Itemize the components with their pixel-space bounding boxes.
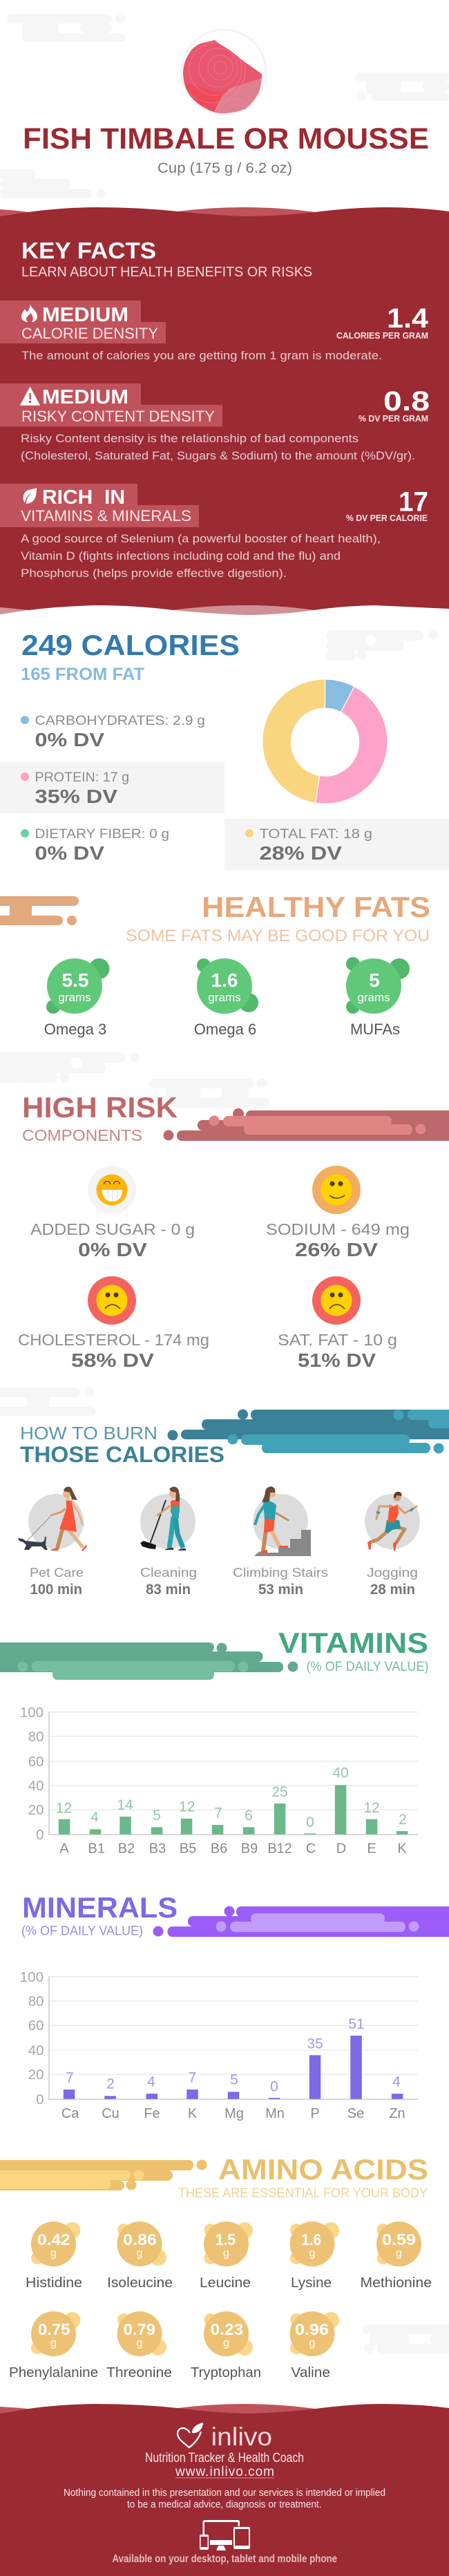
bar chart: minerals: 4: [147, 2074, 155, 2090]
item: cholesterol: CHOLESTEROL - 174 mg: [18, 1331, 209, 1349]
label: medium: MEDIUM: [42, 386, 128, 408]
description: [21, 432, 415, 462]
subheading: components: COMPONENTS: [22, 1126, 142, 1144]
amino: phenylalanine: g: [50, 2338, 57, 2349]
item: sodium: SODIUM - 649 mg: [266, 1220, 410, 1238]
amino: tryptophan: Tryptophan: [191, 2365, 261, 2380]
activity: pet care: [18, 1487, 87, 1598]
amino: isoleucine: 0.86: [123, 2231, 157, 2248]
bar chart: vitamins: B6: [211, 1841, 227, 1857]
value: 1.4: 1.4: [387, 303, 429, 334]
fact: risky content density: [0, 383, 430, 462]
bar chart: vitamins: 20: [28, 1802, 44, 1818]
bar chart: vitamins: 14: [117, 1797, 133, 1813]
label: calorie density: CALORIE DENSITY: [21, 325, 158, 342]
legend: protein: PROTEIN: 17 g: [35, 770, 129, 785]
legend: carbohydrates: [21, 713, 205, 750]
amino: isoleucine: Isoleucine: [107, 2275, 173, 2291]
bar chart: minerals: 60: [28, 2018, 44, 2034]
bar chart: vitamins: 40: [28, 1778, 44, 1794]
amino: lysine: g: [309, 2248, 315, 2260]
bar chart: minerals: 35: [307, 2036, 323, 2052]
bar chart: vitamins: 40: [332, 1765, 349, 1781]
badge: MUFAs: MUFAs: [350, 1021, 400, 1038]
unit: % DV PER CALORIE: [346, 513, 428, 523]
subheading: LEARN ABOUT HEALTH BENEFITS OR RISKS: [21, 265, 312, 280]
item: cholesterol: 58% DV: [71, 1349, 154, 1371]
subheading: from fat: 165 FROM FAT: [21, 665, 144, 684]
bar chart: vitamins: 100: [20, 1705, 44, 1721]
bar chart: vitamins: 12: [363, 1800, 380, 1816]
amino: isoleucine: g: [137, 2248, 142, 2260]
amino: tryptophan: 0.23: [211, 2320, 243, 2338]
fact: rich in vitamins and minerals: [0, 484, 428, 580]
description: (Cholesterol, Saturated Fat, Sugars & Sodium) to the amount (%DV/gr).: [21, 449, 415, 462]
value: 0.8: 0.8: [383, 386, 430, 417]
bar chart: vitamins: B2: [118, 1841, 135, 1857]
subheading: (% OF DAILY VALUE): [307, 1660, 428, 1674]
panel: calories and macronutrients: [0, 629, 449, 870]
badge: MUFAs: 5: [369, 969, 380, 991]
subheading: THESE ARE ESSENTIAL FOR YOUR BODY: [178, 2186, 428, 2201]
item: saturated fat: 51% DV: [298, 1349, 376, 1371]
amino: valine: 0.96: [295, 2320, 329, 2338]
tagline: Nutrition Tracker & Health Coach: [145, 2451, 304, 2465]
amino: leucine: g: [223, 2248, 229, 2260]
amino: leucine: Leucine: [200, 2275, 251, 2291]
legend: protein: 35% DV: [35, 786, 117, 807]
badge: MUFAs: [346, 957, 410, 1038]
bar chart: minerals: 2: [106, 2076, 115, 2092]
panel: healthy fats: [0, 891, 430, 1038]
disclaimer: Nothing contained in this presentation and our services is intended or implied: [64, 2487, 385, 2499]
item: cholesterol: [18, 1276, 209, 1371]
legend: protein: [21, 770, 129, 807]
amino: valine: g: [309, 2338, 315, 2349]
badge: omega 6: 1.6: [211, 969, 238, 991]
bar chart: minerals: 80: [28, 1993, 44, 2009]
amino: phenylalanine: Phenylalanine: [9, 2365, 98, 2380]
bar chart: minerals: [20, 1969, 418, 2121]
activity: climbing stairs: 53 min: [258, 1582, 303, 1598]
banner: orange shapes: [0, 896, 79, 925]
bar chart: minerals: 7: [189, 2070, 196, 2085]
bar chart: vitamins: B12: [267, 1841, 292, 1857]
activity: cleaning: Cleaning: [140, 1565, 197, 1580]
badge: omega 6: [194, 958, 258, 1038]
panel: vitamins: [0, 1627, 428, 1857]
logo wordmark: inlivo: [211, 2423, 272, 2451]
amino: threonine: 0.79: [124, 2320, 155, 2338]
badge: omega 3: 5.5: [62, 969, 88, 991]
bar chart: minerals: Mn: [265, 2106, 285, 2121]
banner: yellow shapes: [0, 2160, 207, 2190]
unit: CALORIES PER GRAM: [336, 331, 428, 341]
banner: teal shapes: [167, 1410, 449, 1454]
activity: jogging: Jogging: [367, 1565, 418, 1580]
bar chart: vitamins: 0: [36, 1827, 44, 1843]
label: vitamins and minerals: VITAMINS & MINERALS: [21, 507, 191, 524]
panel: key facts: [0, 207, 449, 615]
legend: dietary fiber: 0% DV: [35, 842, 104, 864]
bar chart: minerals: P: [310, 2106, 320, 2121]
bar chart: vitamins: 0: [306, 1815, 314, 1830]
amino: histidine: g: [50, 2248, 57, 2260]
banner: purple shapes: [153, 1906, 449, 1937]
bar chart: vitamins: B9: [241, 1841, 258, 1857]
bar chart: vitamins: 80: [28, 1729, 44, 1745]
heading: healthy fats: HEALTHY FATS: [202, 891, 430, 923]
amino: histidine: 0.42: [37, 2231, 70, 2248]
icon: devices: [200, 2520, 250, 2550]
bar chart: minerals: Cu: [102, 2106, 120, 2121]
item: sodium: [266, 1166, 410, 1260]
fact: calorie density: [0, 301, 429, 362]
badge: omega 6: Omega 6: [194, 1021, 256, 1038]
legend: total fat: 28% DV: [260, 842, 342, 864]
bar chart: minerals: Ca: [61, 2106, 79, 2121]
icon: flame: [21, 304, 37, 322]
activity: jogging: [365, 1492, 420, 1598]
description: [21, 532, 381, 580]
bar chart: minerals: 5: [230, 2072, 238, 2088]
heading: amino acids: AMINO ACIDS: [218, 2153, 428, 2186]
amino: methionine: 0.59: [382, 2231, 416, 2248]
bar chart: minerals: 20: [28, 2067, 44, 2083]
badge: omega 6: grams: [208, 991, 241, 1004]
disclaimer: to be a medical advice, diagnosis or treatment.: [127, 2499, 322, 2510]
legend: carbohydrates: 0% DV: [35, 729, 104, 750]
amino: lysine: 1.6: [301, 2231, 321, 2248]
heading: minerals: MINERALS: [22, 1891, 178, 1924]
bar chart: minerals: Fe: [144, 2106, 160, 2121]
bar chart: minerals: 51: [348, 2016, 365, 2032]
amino: methionine: g: [396, 2248, 402, 2260]
legend: carbohydrates: CARBOHYDRATES: 2.9 g: [35, 713, 205, 728]
hero image: fish fillet: [181, 29, 267, 115]
title: FISH TIMBALE OR MOUSSE: [23, 122, 429, 155]
bar chart: vitamins: K: [397, 1841, 407, 1857]
amino: lysine: [290, 2222, 339, 2291]
amino: threonine: g: [137, 2338, 142, 2349]
activity: cleaning: [140, 1487, 197, 1598]
badge: omega 3: Omega 3: [44, 1021, 106, 1038]
amino: phenylalanine: [9, 2311, 98, 2380]
amino: leucine: [200, 2222, 253, 2291]
bar chart: vitamins: C: [306, 1841, 316, 1857]
bar chart: minerals: 0: [36, 2092, 44, 2108]
heading: key facts: KEY FACTS: [21, 238, 156, 263]
item: added sugar: [30, 1166, 195, 1260]
bar chart: vitamins: 25: [271, 1784, 288, 1800]
bar chart: minerals: Se: [347, 2106, 364, 2121]
activity: jogging: 28 min: [370, 1582, 415, 1598]
heading: calories: 249 CALORIES: [21, 629, 240, 661]
icon: warning: [21, 388, 39, 405]
bar chart: minerals: 40: [28, 2043, 44, 2058]
activity: cleaning: 83 min: [146, 1582, 191, 1598]
panel: minerals: [20, 1891, 449, 2121]
bar chart: vitamins: [20, 1705, 418, 1857]
amino: threonine: Threonine: [106, 2365, 172, 2380]
logo: heart and leaf: [178, 2423, 203, 2447]
amino: tryptophan: g: [223, 2338, 229, 2349]
banner: green shapes: [0, 1642, 298, 1680]
amino: methionine: Methionine: [361, 2275, 432, 2291]
amino: valine: Valine: [292, 2365, 330, 2380]
description: A good source of Selenium (a powerful booster of heart health),: [21, 532, 381, 545]
bar chart: vitamins: 6: [245, 1808, 253, 1824]
panel: amino acids: [0, 2153, 432, 2380]
bar chart: vitamins: 60: [28, 1754, 44, 1770]
disclaimer: [64, 2487, 385, 2510]
bar chart: minerals: Zn: [389, 2106, 405, 2121]
bar chart: vitamins: E: [367, 1841, 376, 1857]
subheading: (% OF DAILY VALUE): [21, 1924, 143, 1939]
legend: dietary fiber: DIETARY FIBER: 0 g: [35, 826, 169, 842]
banner: red shapes: [163, 1108, 449, 1141]
label: rich in: RICH IN: [42, 486, 125, 509]
description: The amount of calories you are getting from 1 gram is moderate.: [21, 349, 382, 362]
item: sodium: 26% DV: [295, 1239, 378, 1260]
heading: how to burn: HOW TO BURN: [20, 1423, 157, 1443]
badge: omega 3: grams: [58, 991, 91, 1004]
label: medium: MEDIUM: [42, 304, 128, 326]
bar chart: minerals: 7: [66, 2070, 74, 2085]
badge: omega 3: [44, 958, 109, 1038]
amino: tryptophan: [191, 2311, 261, 2380]
value: 17: 17: [399, 486, 428, 517]
icon: leaf: [23, 488, 37, 504]
amino: histidine: [26, 2222, 82, 2291]
description: Risky Content density is the relationship of bad components: [21, 432, 359, 445]
bar chart: vitamins: 7: [214, 1806, 222, 1821]
amino: histidine: Histidine: [26, 2275, 82, 2291]
panel: high risk components: [18, 1091, 449, 1371]
description: Phosphorus (helps provide effective digestion).: [21, 567, 287, 580]
legend: dietary fiber: [21, 826, 169, 864]
bar chart: minerals: Mg: [224, 2106, 244, 2121]
amino: lysine: Lysine: [291, 2275, 332, 2291]
amino: methionine: [361, 2222, 432, 2291]
bar chart: vitamins: B3: [149, 1841, 166, 1857]
bar chart: vitamins: B1: [88, 1841, 105, 1857]
legend: total fat: TOTAL FAT: 18 g: [260, 826, 372, 842]
activity: climbing stairs: [233, 1486, 328, 1598]
item: added sugar: ADDED SUGAR - 0 g: [30, 1220, 195, 1238]
legend: total fat: [245, 826, 372, 864]
bar chart: vitamins: A: [59, 1841, 69, 1857]
heading: those calories: THOSE CALORIES: [20, 1442, 224, 1467]
item: saturated fat: SAT. FAT - 10 g: [278, 1331, 397, 1349]
website link: www.inlivo.com: [175, 2465, 274, 2479]
label: risky content density: RISKY CONTENT DENSITY: [21, 408, 215, 425]
heading: high risk: HIGH RISK: [22, 1091, 178, 1124]
amino: valine: [290, 2311, 339, 2380]
badge: MUFAs: grams: [357, 991, 390, 1004]
amino: phenylalanine: 0.75: [38, 2320, 70, 2338]
unit: % DV PER GRAM: [359, 414, 428, 424]
subheading: SOME FATS MAY BE GOOD FOR YOU: [126, 927, 430, 945]
amino: threonine: [106, 2311, 172, 2380]
bar chart: vitamins: 5: [153, 1808, 161, 1824]
bar chart: minerals: 0: [270, 2079, 278, 2095]
activity: climbing stairs: Climbing Stairs: [233, 1565, 328, 1580]
bar chart: vitamins: 2: [399, 1812, 407, 1828]
item: added sugar: 0% DV: [78, 1239, 147, 1260]
description: Vitamin D (fights infections including cold and the flu) and: [21, 549, 341, 562]
bar chart: vitamins: 12: [56, 1800, 72, 1816]
panel: how to burn those calories: [18, 1410, 449, 1598]
bar chart: vitamins: 12: [179, 1799, 195, 1815]
amino: leucine: 1.5: [216, 2231, 236, 2248]
activity: pet care: Pet Care: [30, 1565, 84, 1580]
bar chart: vitamins: B5: [180, 1841, 196, 1857]
bar chart: minerals: 4: [392, 2074, 401, 2090]
icon: dog: [18, 1537, 48, 1550]
heading: vitamins: VITAMINS: [278, 1627, 428, 1659]
item: saturated fat: [278, 1276, 397, 1371]
panel: footer: [0, 2404, 449, 2576]
bar chart: minerals: 100: [20, 1969, 44, 1985]
bar chart: minerals: K: [188, 2106, 198, 2121]
availability note: Available on your desktop, tablet and mobile phone: [112, 2553, 337, 2565]
amino: isoleucine: [107, 2222, 173, 2291]
bar chart: vitamins: D: [336, 1841, 346, 1857]
bar chart: vitamins: 4: [90, 1810, 99, 1826]
serving size: Cup (175 g / 6.2 oz): [157, 160, 292, 176]
donut chart: [262, 679, 388, 804]
activity: pet care: 100 min: [30, 1582, 82, 1598]
